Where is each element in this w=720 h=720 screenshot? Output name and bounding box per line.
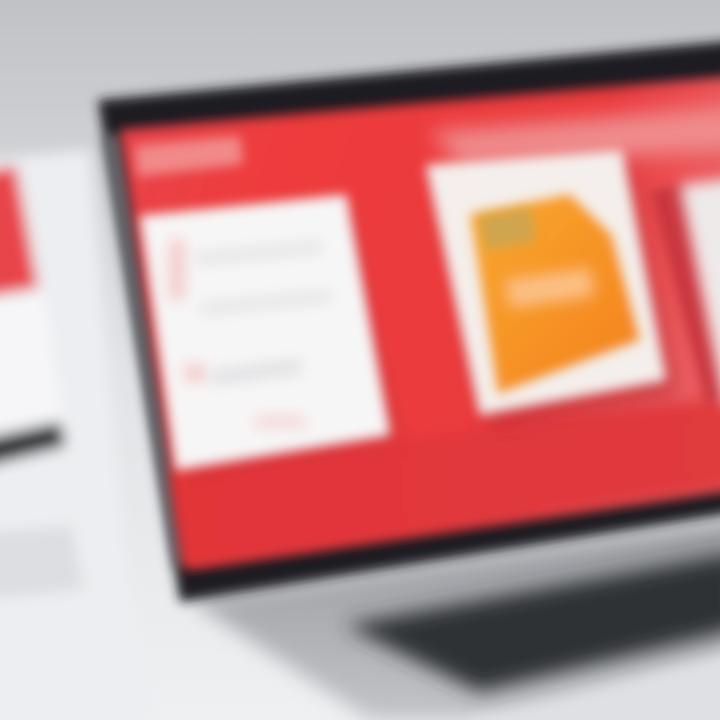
left device: [0, 150, 160, 720]
screen left edge highlight: [104, 135, 184, 570]
document card: [426, 150, 680, 428]
card: [426, 150, 666, 415]
panel shadow: [148, 205, 400, 478]
document corner tag: [478, 208, 536, 250]
left device body: [0, 150, 160, 720]
red display: [120, 76, 720, 568]
white content panel: [140, 195, 400, 478]
panel grey text lines: [195, 243, 332, 384]
left device white panel: [0, 292, 64, 432]
left device lower shade: [0, 526, 84, 600]
lower red band: [172, 395, 720, 566]
right white card: [680, 178, 720, 410]
right card: [650, 178, 720, 410]
orange document icon: [470, 194, 640, 394]
laptop screen: [98, 40, 720, 602]
card shadow: [435, 165, 680, 428]
left device red panel: [0, 166, 38, 298]
top light streak: [430, 106, 720, 165]
right red strip: [650, 185, 720, 405]
panel red marks: [170, 240, 305, 426]
keyboard: [345, 552, 720, 692]
header label: [135, 136, 243, 176]
front deck light: [470, 648, 720, 720]
left device dark bar: [0, 422, 66, 468]
laptop base: [190, 520, 720, 720]
document label: [505, 268, 594, 308]
laptop deck: [190, 520, 720, 720]
panel card: [140, 195, 390, 470]
screen bezel: [98, 40, 720, 602]
document body: [470, 194, 640, 394]
